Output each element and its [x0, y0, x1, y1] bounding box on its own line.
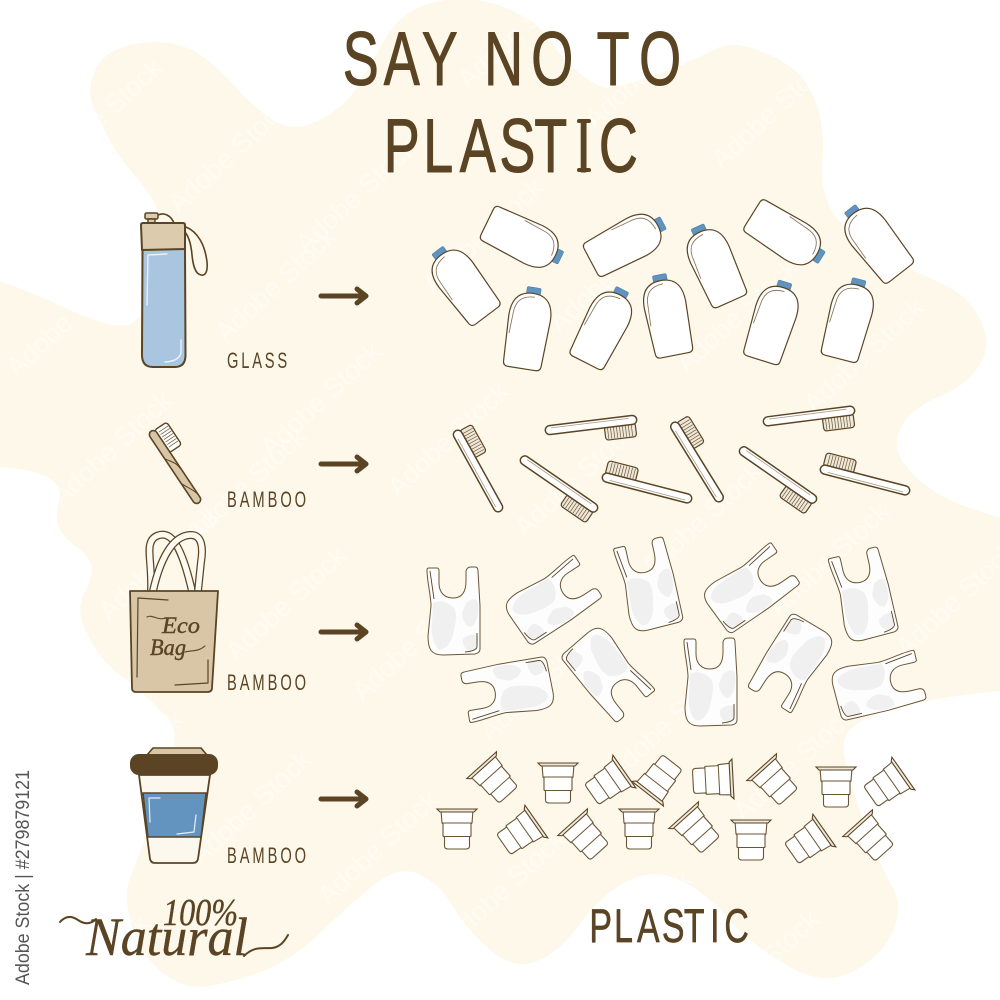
arrow: bag to plastic bags: [321, 625, 366, 639]
icon: plastic bag 4: [699, 542, 802, 635]
text: Adobe Stock: [706, 48, 838, 175]
text: Adobe Stock: [220, 540, 352, 667]
text: Adobe Stock: [833, 88, 965, 215]
text: Adobe Stock: [601, 660, 733, 787]
text: Adobe Stock: [185, 744, 317, 871]
text: Adobe Stock: [728, 700, 860, 827]
icon: plastic bag 3: [613, 536, 684, 634]
text: Adobe Stock: [671, 252, 803, 379]
label: plastic: PLASTIC: [589, 899, 749, 952]
text: Adobe Stock: [855, 740, 987, 867]
logo: 100% natural: [60, 892, 288, 967]
title: [343, 16, 681, 188]
icon: plastic bag 1: [427, 567, 480, 655]
arrow: bamboo to plastic toothbrushes: [321, 457, 366, 471]
label: bamboo cup: BAMBOO: [227, 844, 306, 869]
text: Adobe Stock: [347, 580, 479, 707]
icon: plastic cup 1: [467, 752, 523, 808]
label: bamboo bag: BAMBOO: [227, 671, 306, 696]
icon: plastic bottle 6: [639, 271, 695, 359]
text: Adobe Stock: [439, 824, 571, 951]
icon: plastic toothbrush 3: [511, 454, 599, 524]
icon: plastic bottle 9: [741, 276, 805, 366]
icon: plastic bag 2: [501, 554, 604, 647]
text: Adobe Stock: [36, 52, 168, 179]
text: Adobe Stock: [382, 376, 514, 503]
icon: plastic bag 8: [684, 638, 737, 726]
icon: plastic bottle 10: [833, 196, 917, 286]
text: Adobe Stock: [93, 500, 225, 627]
arrow: glass to plastic bottles: [321, 289, 366, 303]
panel: plastic toothbrushes: [452, 406, 914, 524]
text: Adobe Stock: [798, 292, 930, 419]
text: Adobe Stock: [566, 864, 698, 991]
icon: plastic cup 2: [538, 763, 578, 803]
icon: plastic toothbrush 7: [763, 406, 857, 439]
text: Adobe Stock: [46, 385, 178, 512]
icon: plastic cup 8: [859, 757, 915, 813]
icon: plastic cup 10: [492, 805, 548, 861]
title: PLASTIC: [384, 103, 638, 188]
icon: plastic cup 7: [816, 767, 856, 807]
text: Adobe Stock: [290, 132, 422, 259]
panel: plastic bottles: [421, 196, 917, 372]
icon: plastic cup 9: [437, 809, 477, 849]
text: Adobe Stock: [163, 92, 295, 219]
text: Adobe Stock: [1, 256, 133, 383]
text: Adobe Stock: [636, 456, 768, 583]
icon: plastic bottle 7: [678, 218, 750, 310]
logo: 100% natural: Natural: [85, 907, 248, 967]
icon: plastic cup 4: [632, 750, 688, 806]
icon: plastic bag 10: [829, 650, 927, 721]
logo: 100% natural: 100%: [163, 892, 238, 934]
icon: plastic bottle 4: [581, 204, 673, 280]
icon: plastic toothbrush 8: [819, 452, 914, 496]
arrow: cup to plastic cups: [321, 792, 366, 806]
icon: plastic bottle 1: [421, 238, 503, 328]
icon: reusable coffee cup: [130, 748, 218, 863]
text: Adobe Stock: [58, 704, 190, 831]
icon: plastic cup 11: [558, 809, 614, 865]
icon: plastic cup 13: [669, 802, 725, 858]
text: Adobe Stock: [210, 221, 342, 348]
panel: plastic cups: [437, 750, 915, 870]
icon: plastic toothbrush 2: [545, 415, 639, 447]
text: Adobe Stock: [255, 336, 387, 463]
label: glass: GLASS: [227, 349, 287, 374]
text: Adobe Stock: [763, 496, 895, 623]
text: Adobe Stock: [509, 416, 641, 543]
icon: plastic bag 6: [460, 656, 556, 723]
icon: plastic bottle 8: [741, 196, 833, 276]
icon: eco tote bag: Eco: [161, 613, 200, 638]
stock image credit: Adobe Stock | #279879121: [13, 770, 34, 985]
icon: plastic cup 15: [780, 814, 836, 870]
icon: plastic bottle 2: [478, 203, 570, 277]
icon: plastic toothbrush 5: [669, 414, 736, 504]
text: Adobe Stock: [312, 784, 444, 911]
icon: plastic cup 12: [619, 809, 659, 849]
icon: plastic bottle 11: [818, 274, 880, 364]
icon: plastic toothbrush 1: [452, 423, 515, 513]
text: Adobe Stock: [417, 172, 549, 299]
icon: plastic cup 16: [843, 810, 899, 866]
icon: plastic cup 5: [692, 759, 734, 801]
icon: plastic cup 6: [747, 754, 803, 810]
icon: plastic toothbrush 6: [731, 445, 818, 515]
title: SAY NO TO: [343, 16, 681, 101]
icon: plastic cup 3: [580, 755, 636, 811]
icon: plastic bag 7: [559, 622, 656, 724]
text: Adobe Stock: [474, 620, 606, 747]
icon: plastic bag 9: [746, 611, 838, 714]
panel: eco glass bottle: [141, 213, 207, 367]
icon: eco tote bag: Bag: [150, 635, 186, 660]
icon: plastic cup 14: [731, 820, 771, 860]
icon: plastic bottle 5: [567, 280, 641, 372]
icon: plastic bottle 3: [501, 284, 555, 372]
panel: plastic bags: [427, 536, 927, 726]
icon: bamboo toothbrush: [148, 421, 214, 505]
label: bamboo toothbrush: BAMBOO: [227, 488, 306, 513]
text: Adobe Stock: [579, 8, 711, 135]
icon: eco tote bag: [130, 535, 218, 692]
icon: plastic toothbrush 4: [601, 460, 696, 504]
text: Adobe Stock: [544, 212, 676, 339]
icon: plastic bag 5: [828, 546, 899, 644]
text: Adobe Stock: [180, 421, 312, 548]
